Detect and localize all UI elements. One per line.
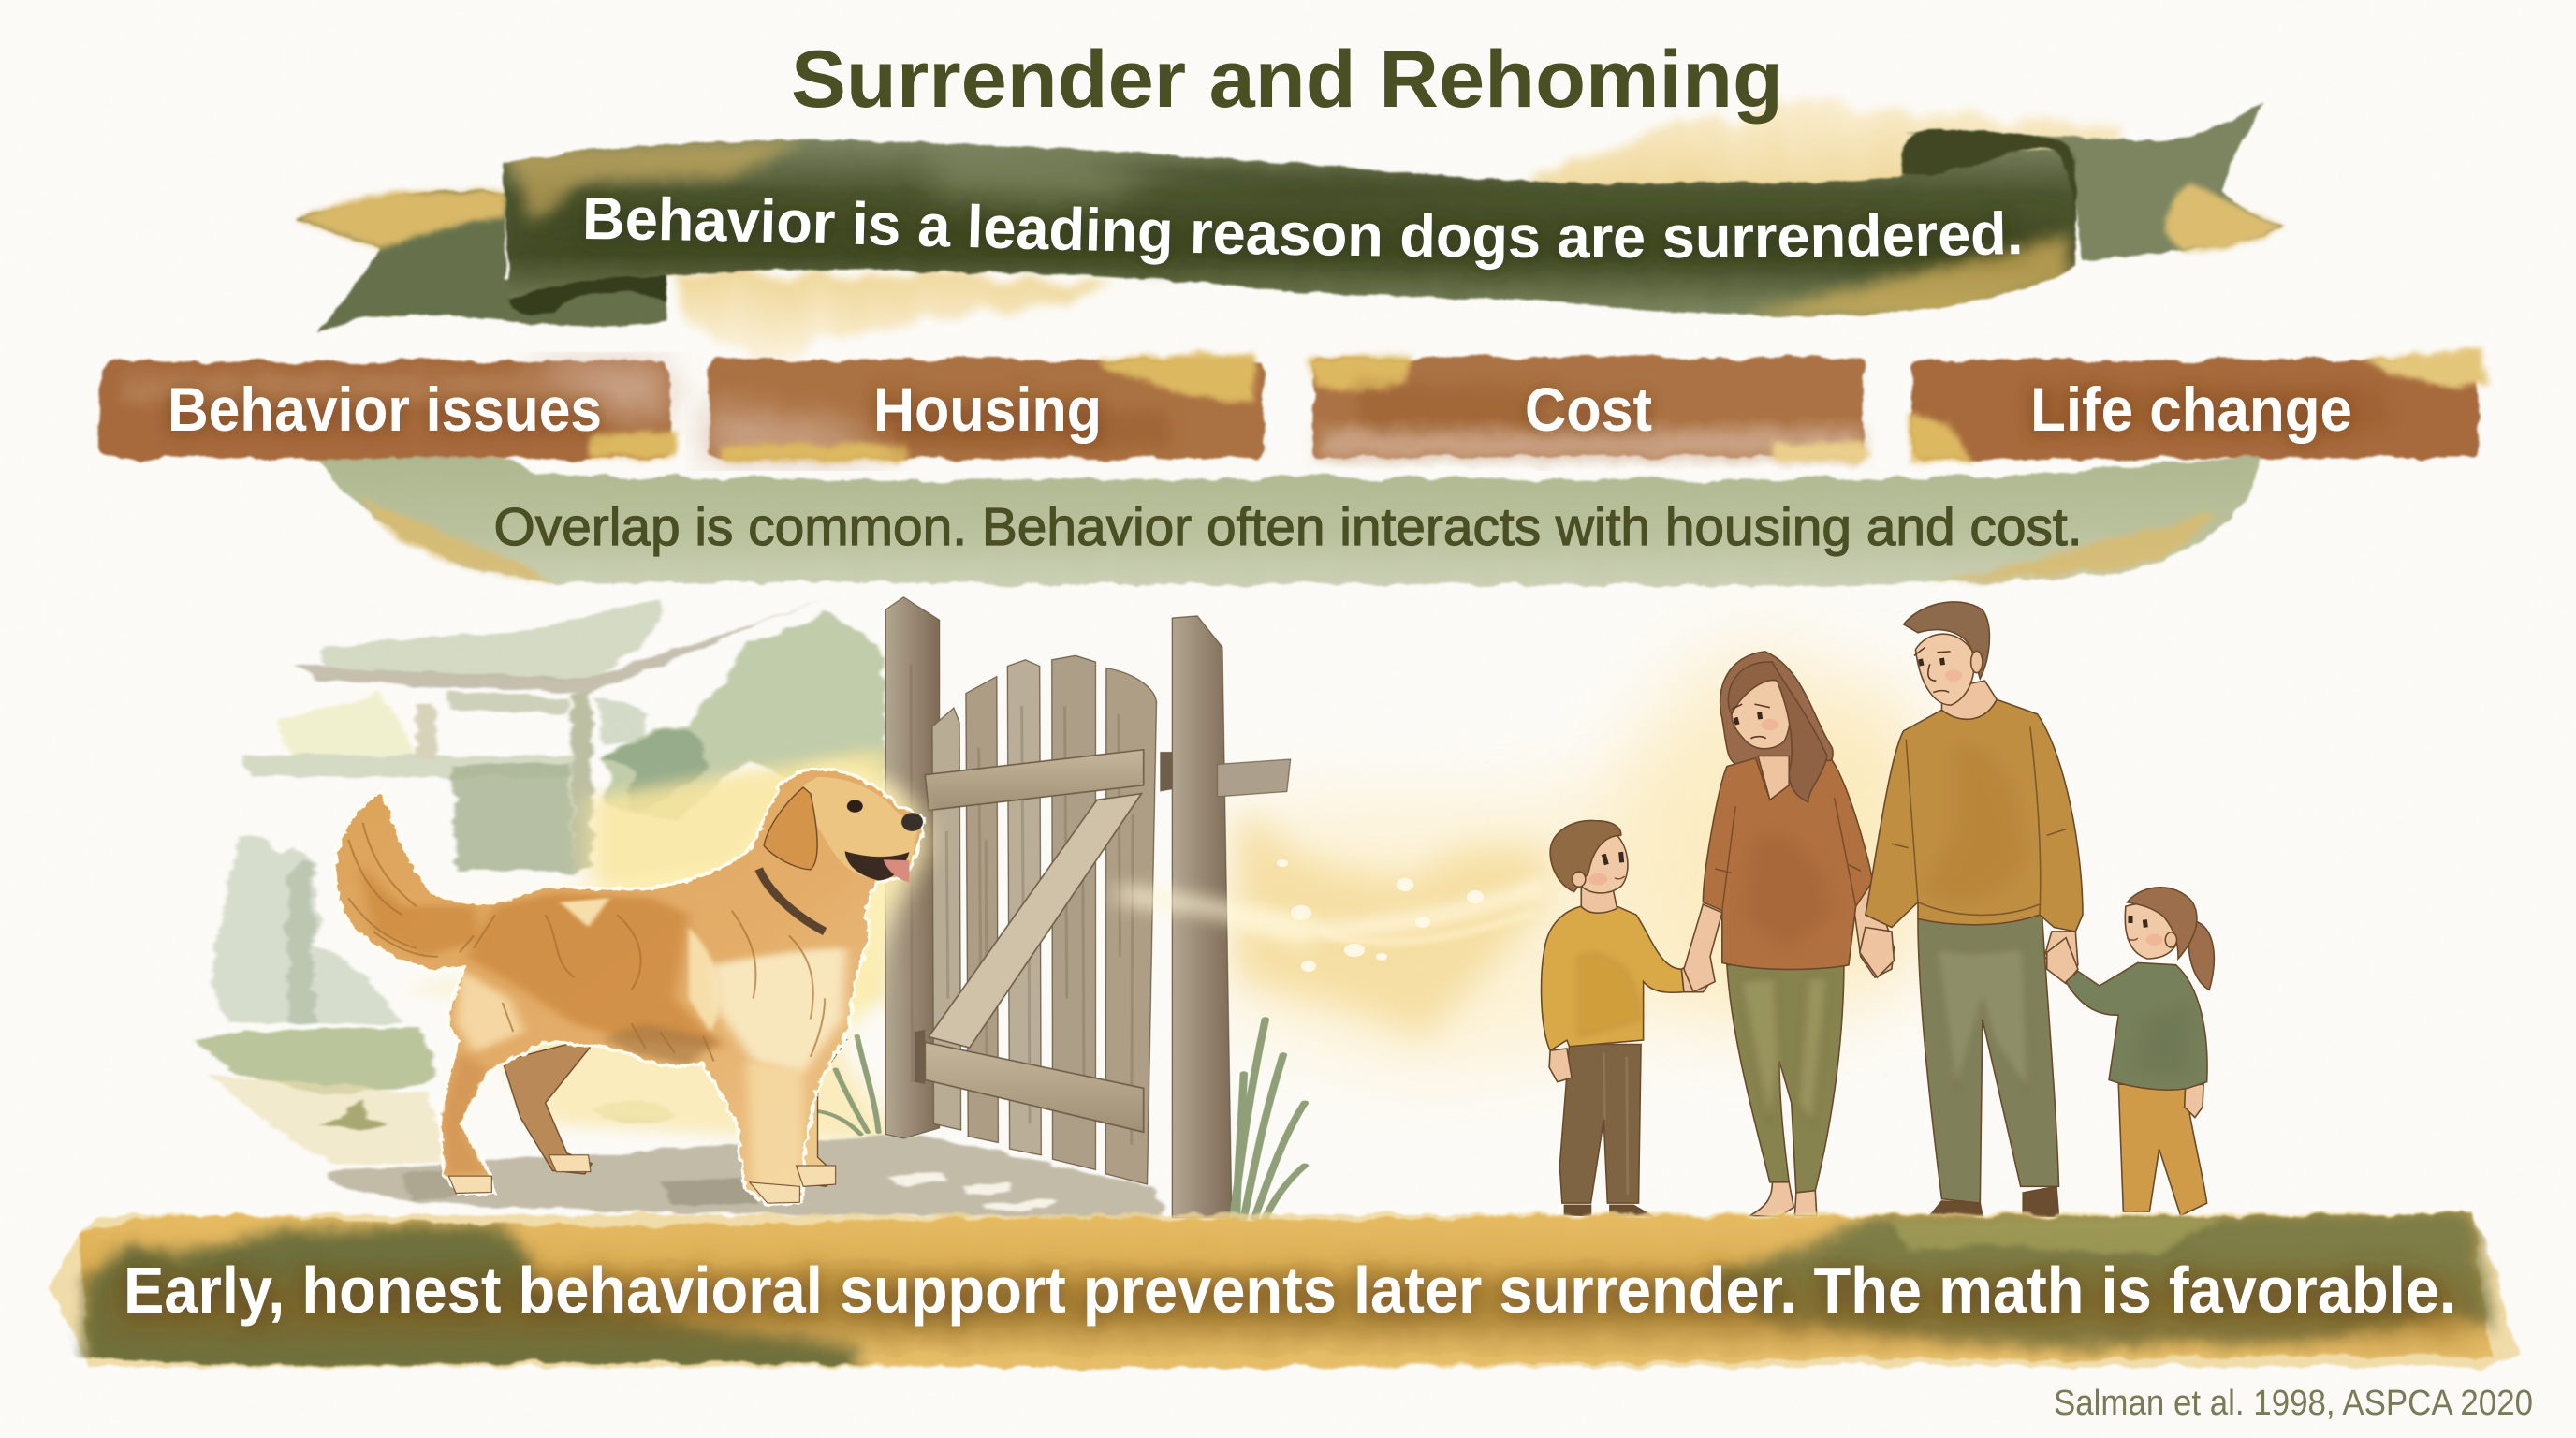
- ribbon banner: Behavior is a leading reason dogs are surrendered.: [582, 195, 2027, 281]
- rails: [925, 750, 1144, 811]
- sage overlap banner: [317, 455, 2261, 586]
- backyard background: [195, 597, 886, 1166]
- dog fur shading: [359, 865, 846, 1199]
- citation: Salman et al. 1998, ASPCA 2020: [2054, 1384, 2533, 1423]
- dog body: [337, 770, 922, 1203]
- pickets: [932, 655, 1156, 1184]
- dog collar: [759, 869, 825, 932]
- cause tag: Behavior issues: [99, 361, 676, 459]
- band wash: [80, 1208, 2495, 1376]
- ribbon right curl: [1902, 130, 2075, 262]
- ribbon text: [582, 239, 2027, 257]
- boy: [1542, 820, 1714, 1216]
- gate: [886, 597, 1310, 1218]
- left post: [886, 597, 940, 1138]
- ribbon main band: [503, 139, 2075, 320]
- dog far legs: [503, 1036, 599, 1174]
- mother: [1684, 652, 1894, 1216]
- band text: Early, honest behavioral support prevents later surrender. The math is favorable.: [124, 1254, 2456, 1327]
- tag label: Cost: [1525, 374, 1652, 444]
- dog mouth and tongue: [845, 851, 909, 882]
- cause tag: Life change: [1910, 348, 2490, 461]
- sage swoosh: [317, 455, 2261, 586]
- glow behind family: [1619, 646, 1947, 1039]
- grass tufts: [817, 1020, 1305, 1218]
- ribbon left curl: [510, 275, 667, 315]
- girl: [2047, 888, 2214, 1216]
- golden retriever: [337, 770, 923, 1203]
- tag label: Life change: [2030, 374, 2352, 444]
- ground shadow: [323, 1137, 1164, 1219]
- ribbon banner: [294, 101, 2286, 333]
- dog ear: [764, 787, 817, 870]
- illustration: family: [1542, 602, 2214, 1216]
- closing message band: [49, 1208, 2518, 1376]
- cause tag: Cost: [1309, 354, 1868, 461]
- light beam between gate and family: [1217, 730, 1853, 1077]
- title: Surrender and Rehoming: [791, 35, 1783, 125]
- side rail: [1218, 759, 1291, 797]
- wood grain: [911, 664, 1213, 1166]
- illustration: dog at gate: [195, 597, 1310, 1219]
- cause tag: Housing: [710, 352, 1264, 461]
- overlap note: Overlap is common. Behavior often interacts with housing and cost.: [494, 497, 2082, 557]
- dog eye and nose: [847, 800, 923, 831]
- glow around dog: [474, 764, 926, 1059]
- band pale rim: [49, 1213, 2518, 1367]
- ribbon right tail: [1904, 102, 2284, 260]
- dog fur strokes: [348, 823, 825, 1061]
- tag label: Behavior issues: [168, 374, 602, 444]
- dog muzzle and head: [803, 777, 918, 879]
- dog paws: [448, 1155, 836, 1203]
- father: [1860, 602, 2083, 1216]
- tag label: Housing: [873, 374, 1102, 444]
- yellow ground glow: [402, 748, 903, 1145]
- yellow wash behind ribbon: [669, 97, 2125, 360]
- right post: [1172, 616, 1232, 1218]
- ribbon left tail: [297, 190, 667, 334]
